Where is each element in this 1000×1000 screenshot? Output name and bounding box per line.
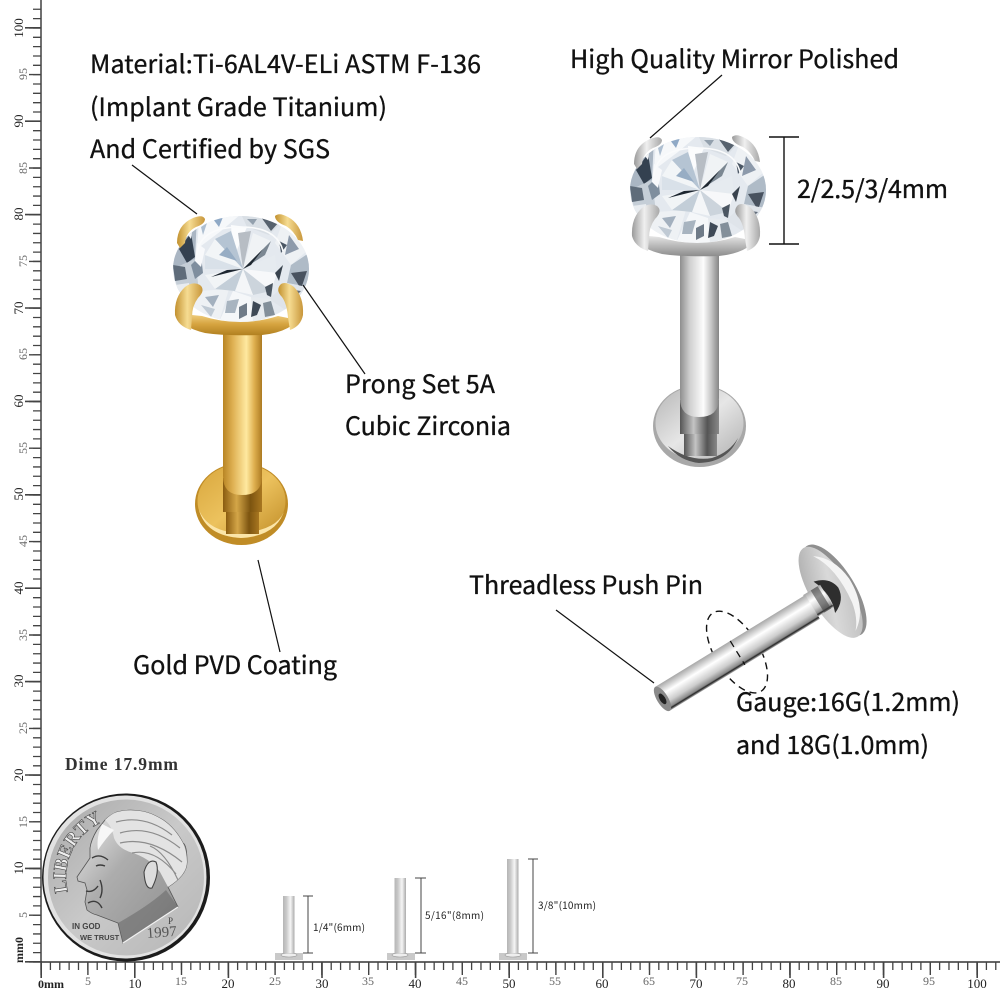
- icon: dime coin: 1997: [146, 924, 178, 942]
- vertical scale labels: 30: [11, 674, 26, 688]
- silver shaft: [680, 254, 719, 417]
- gem: [171, 214, 311, 324]
- text: 8mm: 5/16"(8mm): [425, 907, 484, 922]
- leader: material: [132, 165, 197, 214]
- vertical scale labels: 65: [16, 348, 30, 360]
- horizontal scale labels: 0mm: [38, 977, 64, 991]
- text: 10mm: 3/8"(10mm): [538, 897, 596, 912]
- vertical scale labels: 40: [11, 582, 26, 594]
- leader: prong set: [303, 285, 365, 374]
- icon: threadless pin: [629, 535, 879, 744]
- text: dime: Dime 17.9mm: [65, 754, 178, 774]
- vertical scale labels: 35: [16, 629, 30, 641]
- gold neck: [223, 478, 262, 534]
- vertical scale labels: 75: [16, 255, 30, 267]
- horizontal scale labels: 45: [456, 974, 468, 988]
- dimension: gem size: [769, 137, 799, 244]
- dimension: 10mm: [528, 859, 538, 953]
- portrait: [77, 810, 187, 943]
- vertical scale labels: 5: [16, 912, 30, 918]
- collar: [803, 585, 834, 617]
- text: gem size: 2/2.5/3/4mm: [797, 170, 948, 206]
- horizontal scale labels: 10: [128, 976, 142, 991]
- gem: [628, 135, 768, 245]
- icon: 6mm pin: [275, 896, 303, 960]
- icon: dime coin: WE TRUST: [80, 933, 120, 942]
- text: material: (Implant Grade Titanium): [90, 88, 387, 124]
- dimension: 6mm: [303, 896, 313, 953]
- icon: dime coin: [42, 794, 210, 962]
- text: gauge: [736, 683, 960, 762]
- text: prong set: [345, 365, 511, 443]
- text: mirror polished: High Quality Mirror Polished: [570, 40, 899, 76]
- horizontal scale labels: 85: [830, 974, 842, 988]
- flat back disc: [786, 535, 879, 647]
- silver setting: [632, 135, 760, 256]
- horizontal scale labels: 95: [923, 974, 935, 988]
- horizontal scale labels: 50: [502, 976, 516, 991]
- vertical scale labels: 70: [11, 302, 26, 314]
- icon: dime coin: P: [168, 916, 173, 926]
- vertical scale labels: 10: [11, 862, 26, 874]
- vertical axis: [33, 0, 41, 963]
- horizontal scale labels: 40: [408, 976, 422, 991]
- horizontal scale labels: 5: [85, 974, 91, 988]
- leader: threadless: [556, 610, 654, 683]
- icon: dime coin: LIBERTY: [53, 810, 100, 894]
- vertical scale labels: 60: [11, 394, 26, 408]
- horizontal scale labels: 20: [222, 976, 234, 991]
- icon: 8mm pin: [387, 878, 415, 960]
- icon: silver labret: [628, 135, 768, 467]
- vertical scale labels: 85: [16, 162, 30, 174]
- horizontal axis: [40, 962, 1000, 970]
- text: material: Material:Ti-6AL4V-ELi ASTM F-136: [90, 45, 481, 81]
- text: 6mm: 1/4"(6mm): [313, 919, 365, 934]
- vertical scale labels: 25: [16, 722, 30, 734]
- text: gold coating: Gold PVD Coating: [133, 646, 337, 682]
- dashed ellipse back: [694, 601, 780, 703]
- text: threadless: Threadless Push Pin: [469, 566, 703, 602]
- text: prong set: Prong Set 5A: [345, 365, 496, 401]
- text: gauge: Gauge:16G(1.2mm): [736, 683, 960, 719]
- text: material: And Certified by SGS: [90, 130, 330, 166]
- dimension: 8mm: [415, 878, 426, 953]
- text: gauge: and 18G(1.0mm): [736, 726, 929, 762]
- gold base disc: [195, 463, 288, 545]
- text: prong set: Cubic Zirconia: [345, 407, 511, 443]
- horizontal scale labels: 30: [316, 976, 328, 991]
- vertical scale labels: 50: [11, 488, 26, 500]
- horizontal scale labels: 65: [643, 974, 655, 988]
- vertical scale labels: 80: [11, 208, 26, 220]
- horizontal scale labels: 90: [876, 976, 890, 991]
- icon: gold labret: [171, 214, 311, 545]
- vertical scale labels: 20: [11, 768, 26, 782]
- coin inscription: [66, 823, 100, 892]
- vertical scale labels: mm0: [12, 937, 26, 963]
- horizontal scale labels: 75: [736, 974, 748, 988]
- horizontal scale labels: [38, 974, 987, 991]
- gold setting: [175, 214, 303, 335]
- vertical scale labels: 45: [16, 535, 30, 547]
- vertical scale labels: [11, 18, 30, 963]
- shaft: [655, 595, 820, 711]
- horizontal scale labels: 35: [362, 974, 374, 988]
- horizontal scale labels: 100: [967, 976, 987, 991]
- vertical scale labels: 95: [16, 68, 30, 80]
- vertical scale labels: 90: [11, 114, 26, 128]
- tip: [651, 684, 675, 714]
- vertical scale labels: 100: [11, 18, 26, 38]
- vertical scale labels: 15: [16, 816, 30, 828]
- vertical scale labels: 55: [16, 442, 30, 454]
- silver neck: [680, 400, 719, 456]
- horizontal scale labels: 70: [690, 976, 702, 991]
- horizontal scale labels: 80: [782, 976, 796, 991]
- horizontal scale labels: 15: [175, 974, 187, 988]
- horizontal scale labels: 60: [596, 976, 608, 991]
- icon: 10mm pin: [499, 859, 527, 960]
- silver base disc: [653, 385, 746, 467]
- horizontal scale labels: 25: [269, 974, 281, 988]
- horizontal scale labels: 55: [549, 974, 561, 988]
- leader: mirror polished: [650, 75, 722, 138]
- text: material: [90, 45, 481, 166]
- gold shaft: [223, 332, 262, 495]
- leader: gold coating: [258, 560, 280, 652]
- icon: dime coin: IN GOD: [72, 922, 101, 931]
